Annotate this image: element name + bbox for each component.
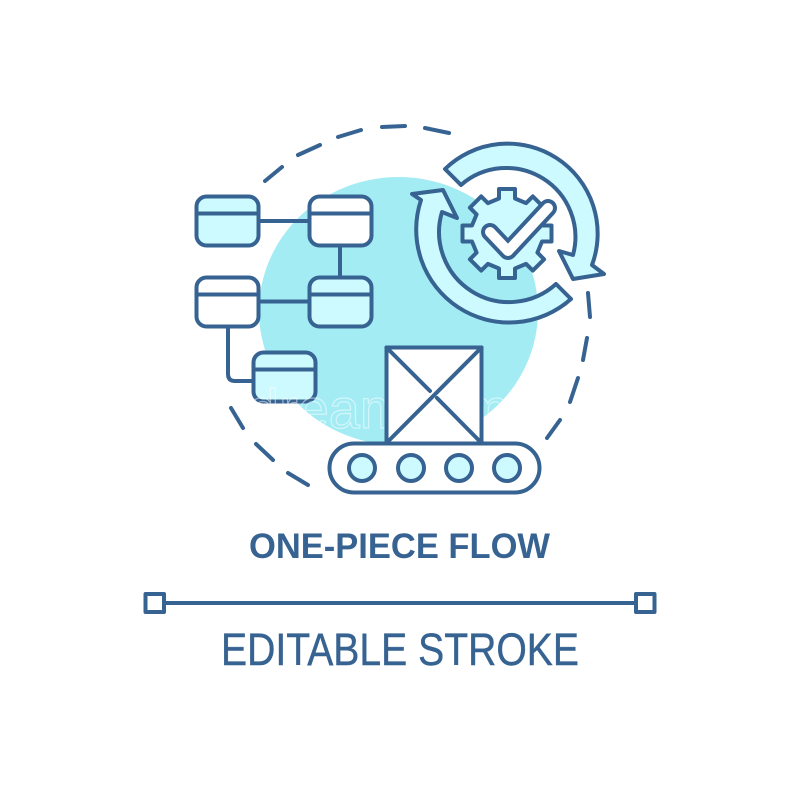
roller 4: [494, 455, 520, 481]
flow box 3: [196, 278, 258, 326]
flow box 5: [254, 352, 316, 402]
editable stroke line with handles: [146, 594, 654, 612]
gear: [462, 189, 552, 278]
bottom circular arrow: [412, 190, 571, 323]
flowchart diagram: [196, 196, 372, 402]
roller 1: [349, 455, 375, 481]
subtitle: EDITABLE STROKE: [221, 624, 579, 675]
title: ONE-PIECE FLOW: [249, 527, 550, 566]
watermark: dreamstime: [248, 377, 540, 440]
box: [386, 348, 482, 444]
package on conveyor: [330, 348, 540, 492]
conveyor belt: [330, 444, 540, 492]
flow box 1: [196, 196, 258, 246]
left handle: [146, 594, 164, 612]
flow box 2: [310, 196, 372, 246]
flow box 4: [310, 278, 372, 326]
top circular arrow: [445, 144, 604, 279]
right handle: [636, 594, 654, 612]
roller 3: [446, 455, 472, 481]
dashed circle: [231, 126, 590, 485]
roller 2: [398, 455, 424, 481]
check mark: [490, 208, 548, 251]
cycle arrows with gear: [412, 144, 604, 323]
connector lines: [228, 221, 340, 381]
background circle blob: [259, 177, 538, 445]
